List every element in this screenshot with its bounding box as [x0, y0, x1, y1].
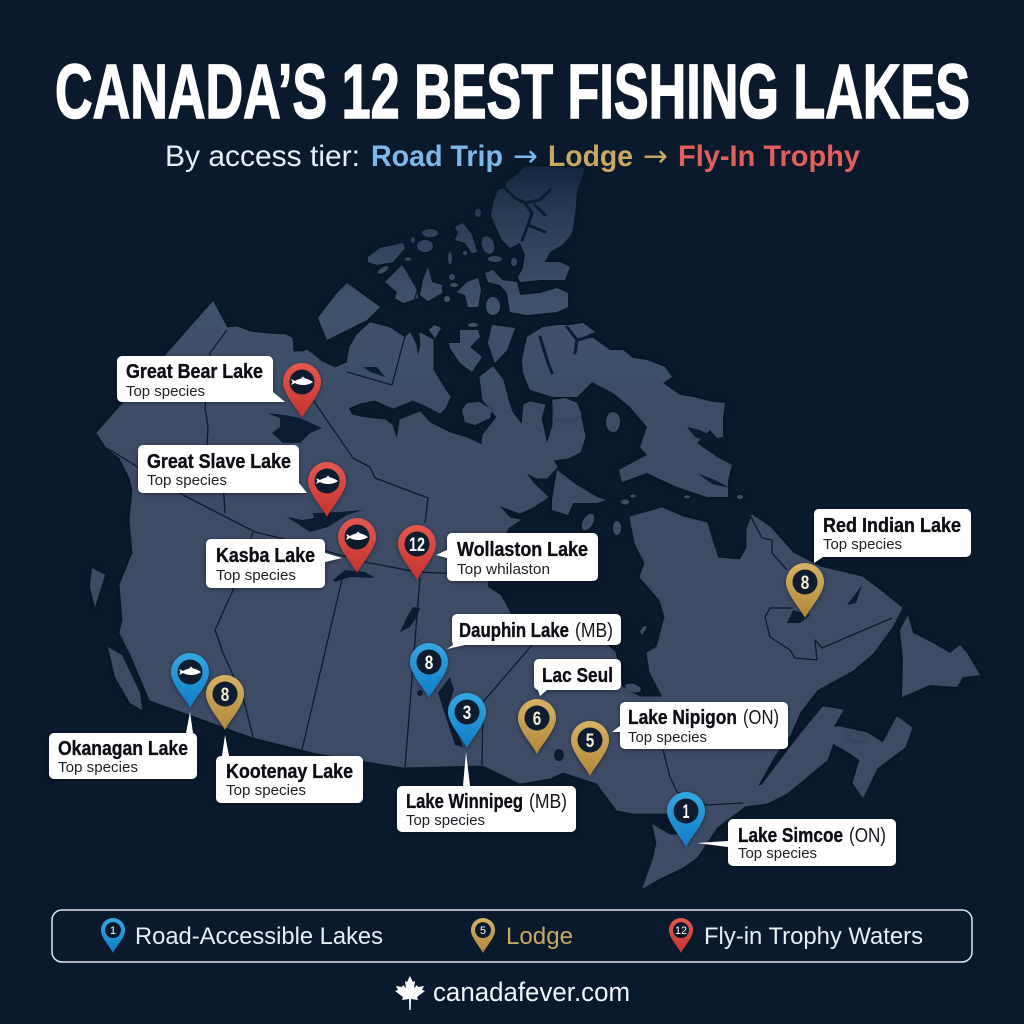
- pin: Kasba Lake: [338, 518, 376, 573]
- callout: Lac Seul: Lac Seul: [542, 664, 613, 687]
- subtitle: Lodge: [548, 140, 633, 173]
- pin: Dauphin Lake: [410, 643, 448, 698]
- callout: Lake Simcoe: (ON): [849, 824, 886, 847]
- callout: Lac Seul: [534, 659, 621, 696]
- callout: Kasba Lake: Kasba Lake: [216, 544, 315, 567]
- legend label: lodge: Lodge: [506, 923, 573, 950]
- Newfoundland: [900, 615, 980, 697]
- pin: Kootenay Lake: 8: [221, 685, 229, 706]
- subtitle: →: [513, 139, 538, 174]
- legend pin: lodge: 5: [480, 925, 486, 937]
- footer: website: canadafever.com: [433, 977, 630, 1007]
- callout: Dauphin Lake: Dauphin Lake: [459, 619, 569, 642]
- callout: Kootenay Lake: Kootenay Lake: [226, 760, 353, 783]
- callout: Lake Winnipeg: Top species: [406, 812, 485, 829]
- arctic islands: [90, 166, 980, 741]
- subtitle: →: [643, 139, 668, 174]
- pin: Lake Nipigon: 5: [586, 731, 595, 752]
- pin: Great Bear Lake: [283, 363, 321, 418]
- pin: Red Indian Lake: 8: [801, 573, 809, 594]
- pin: Wollaston Lake: [398, 525, 436, 580]
- arctic channels and lakes: [267, 367, 862, 761]
- subtitle: [165, 139, 860, 174]
- legend pin: lodge: [471, 918, 495, 953]
- legend pin: fly-in: 12: [675, 925, 687, 937]
- callout: Great Slave Lake: Top species: [147, 472, 227, 489]
- map of Canada: [90, 166, 980, 888]
- legend: [52, 910, 972, 962]
- callout: Wollaston Lake: Wollaston Lake: [457, 538, 588, 561]
- provincial borders: [107, 287, 892, 805]
- callout: Lake Nipigon: Lake Nipigon: [628, 706, 737, 729]
- pin: Lake Simcoe: 1: [682, 802, 690, 823]
- icon: maple leaf: [395, 976, 425, 1010]
- legend label: fly-in: Fly-in Trophy Waters: [704, 923, 923, 950]
- subtitle: Road Trip: [371, 140, 503, 173]
- pin: Dauphin Lake: 8: [425, 653, 433, 674]
- callout: Red Indian Lake: Red Indian Lake: [823, 514, 961, 537]
- callout: Okanagan Lake: Okanagan Lake: [58, 737, 188, 760]
- callout: Great Slave Lake: Great Slave Lake: [147, 450, 291, 473]
- legend pin: fly-in: [669, 918, 693, 953]
- legend pin: road-accessible: 1: [110, 925, 116, 937]
- callout: Lake Simcoe: Top species: [738, 845, 817, 862]
- legend label: road-accessible: Road-Accessible Lakes: [135, 923, 383, 950]
- callout: Lake Simcoe: Lake Simcoe: [738, 824, 843, 847]
- Baffin Island: [522, 323, 732, 497]
- pin: Lac Seul: [518, 699, 556, 754]
- pin: Wollaston Lake: 12: [409, 535, 425, 556]
- callout: Wollaston Lake: [436, 533, 598, 581]
- pin: Lake Simcoe: [667, 792, 705, 847]
- callout: Kasba Lake: Top species: [216, 567, 296, 584]
- callout: Lake Winnipeg: Lake Winnipeg: [406, 790, 523, 813]
- callout: Lake Simcoe: [697, 819, 896, 866]
- mainland: [97, 302, 912, 888]
- callout: Great Bear Lake: Great Bear Lake: [126, 360, 263, 383]
- callout: Dauphin Lake: [447, 614, 621, 649]
- Vancouver Island: [108, 647, 142, 710]
- pin: Lake Winnipeg: 3: [463, 703, 471, 724]
- callout: Red Indian Lake: Top species: [823, 536, 902, 553]
- pin: Lake Nipigon: [571, 721, 609, 776]
- pin: Lac Seul: 6: [533, 709, 541, 730]
- callout: Red Indian Lake: [814, 509, 971, 563]
- callout: Lake Winnipeg: [397, 752, 576, 832]
- callout: Kasba Lake: [206, 539, 342, 588]
- callout: Okanagan Lake: Top species: [58, 759, 138, 776]
- callout: Kootenay Lake: [216, 735, 363, 803]
- Southampton Island: [552, 470, 606, 515]
- callout: Great Slave Lake: [138, 445, 307, 493]
- subtitle: Fly-In Trophy: [678, 140, 860, 173]
- callout: Dauphin Lake: (MB): [575, 619, 613, 642]
- subtitle: By access tier:: [165, 140, 360, 173]
- pin: Okanagan Lake: [171, 653, 209, 708]
- callout: Great Bear Lake: Top species: [126, 383, 205, 400]
- Haida Gwaii: [90, 568, 105, 607]
- legend pin: road-accessible: [101, 918, 125, 953]
- channels on northern islands: [505, 188, 592, 373]
- pin: Lake Winnipeg: [448, 693, 486, 748]
- callout: Lake Nipigon: (ON): [743, 706, 779, 729]
- Prince Edward Island: [848, 733, 868, 741]
- callout: Lake Nipigon: Top species: [628, 729, 707, 746]
- callout: Lake Nipigon: [612, 702, 788, 749]
- callout: Kootenay Lake: Top species: [226, 782, 306, 799]
- pin: Great Slave Lake: [308, 462, 346, 517]
- callout: Lake Winnipeg: (MB): [529, 790, 567, 813]
- callout: Great Bear Lake: [117, 356, 285, 402]
- callout: Wollaston Lake: Top whilaston: [457, 561, 550, 578]
- callout: Okanagan Lake: [49, 712, 197, 779]
- pin: Kootenay Lake: [206, 675, 244, 730]
- pin: Red Indian Lake: [786, 563, 824, 618]
